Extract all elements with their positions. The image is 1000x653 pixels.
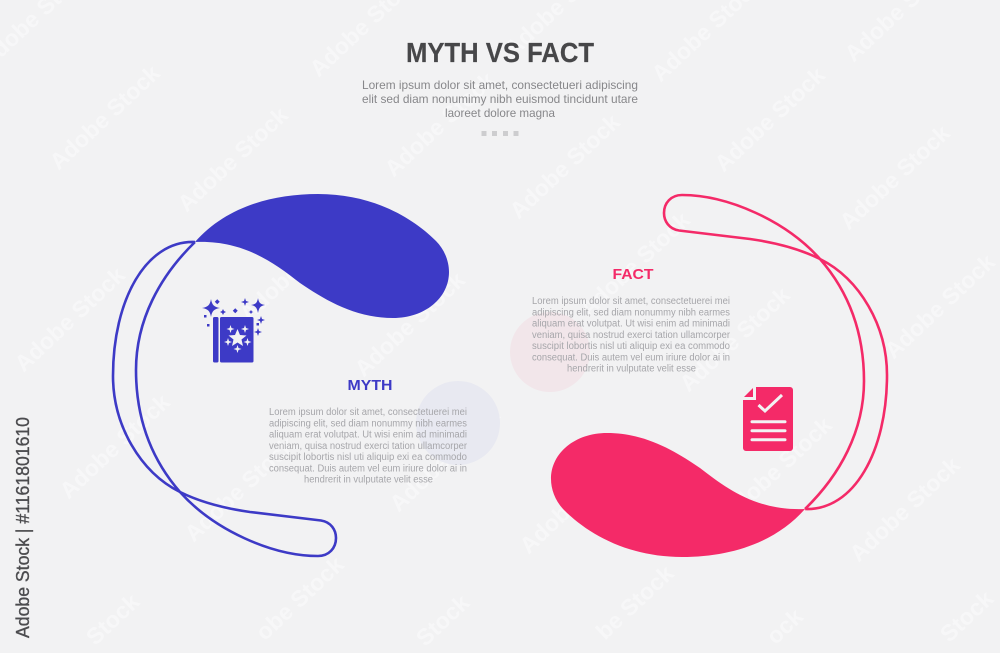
watermark pattern: Adobe Stock [349,267,470,382]
watermark pattern: Adobe Stock [44,60,165,175]
text block: myth: consequat. Duis autem vel eum iriure dolor ai in [269,463,467,474]
text block: myth: Lorem ipsum dolor sit amet, consectetuerei mei [269,407,467,418]
heading: myth: MYTH [348,377,392,394]
text block: fact: aliquam erat volutpat. Ut wisi enim ad minimadi [532,318,730,330]
icon: checklist document [743,387,793,451]
fact blob [551,433,805,557]
title dots [482,131,518,136]
text block: myth: adipiscing elit, sed diam nonummy nibh earmes [269,418,467,429]
icon: magic book [202,298,265,362]
text block: myth [269,407,468,486]
subtitle text: laoreet dolore magna [445,106,555,120]
panel: myth [113,194,500,556]
watermark pattern: Adobe Stock [674,282,795,397]
heading: fact: FACT [612,266,654,283]
text block: myth: veniam, quisa nostrud exerci tation ullamcorper [269,441,468,452]
watermark pattern: Adobe Stock [514,444,635,559]
watermark pattern: Adobe Stock [879,249,1000,364]
watermark pattern: Stock [411,589,474,651]
watermark pattern: obe Stock [250,551,349,645]
text block: fact: veniam, quisa nostrud exerci tation ullamcorper [532,330,731,341]
text block: myth: suscipit lobortis nisl uti aliquip exi ea commodo [269,452,467,463]
subtitle text: Lorem ipsum dolor sit amet, consectetueri adipiscing [362,78,638,92]
watermark pattern: Adobe Stock [709,62,830,177]
text block: fact [532,296,731,374]
title: MYTH VS FACT [406,37,594,68]
text block: fact: adipiscing elit, sed diam nonummy nibh earmes [532,307,730,318]
watermark pattern: Adobe Stock [504,109,625,224]
watermark pattern: Adobe Stock [172,102,293,217]
watermark pattern: Adobe Stock [379,67,500,182]
watermark pattern: ock [761,603,808,649]
text block: myth: hendrerit in vulputate velit esse [304,474,433,486]
text block: fact: suscipit lobortis nisl uti aliquip exi ea commodo [532,341,730,352]
fact outline loop [664,195,887,509]
subtitle text [362,78,638,120]
watermark pattern: Adobe Stock [716,412,837,527]
subtitle text: elit sed diam nonumimy nibh euismod tincidunt utare [362,92,638,106]
myth blob [195,194,449,318]
text block: myth: aliquam erat volutpat. Ut wisi enim ad minimadi [269,430,467,440]
background circle: fact [510,312,590,392]
panel: fact [510,195,887,557]
watermark pattern: Adobe Stock [574,207,695,322]
myth outline loop [113,242,336,556]
watermark pattern: Stock [81,588,144,650]
watermark pattern: Adobe Stock [54,389,175,504]
watermark pattern: Adobe Stock [384,402,505,517]
watermark pattern: Adobe Stock [844,452,965,567]
watermark pattern: be Stock [591,560,679,644]
stock id side label: Adobe Stock | #1161801610 [13,417,33,638]
watermark pattern: Adobe Stock [9,262,130,377]
watermark pattern: Adobe Stock [234,212,355,327]
text block: fact: consequat. Duis autem vel eum iriure dolor ai in [532,352,730,363]
watermark pattern: Adobe Stock [179,432,300,547]
watermark pattern: Stock [935,585,998,647]
background circle: myth [416,381,500,465]
text block: fact: Lorem ipsum dolor sit amet, consectetuerei mei [532,296,730,307]
watermark pattern: Adobe Stock [834,120,955,235]
text block: fact: hendrerit in vulputate velit esse [567,364,696,374]
